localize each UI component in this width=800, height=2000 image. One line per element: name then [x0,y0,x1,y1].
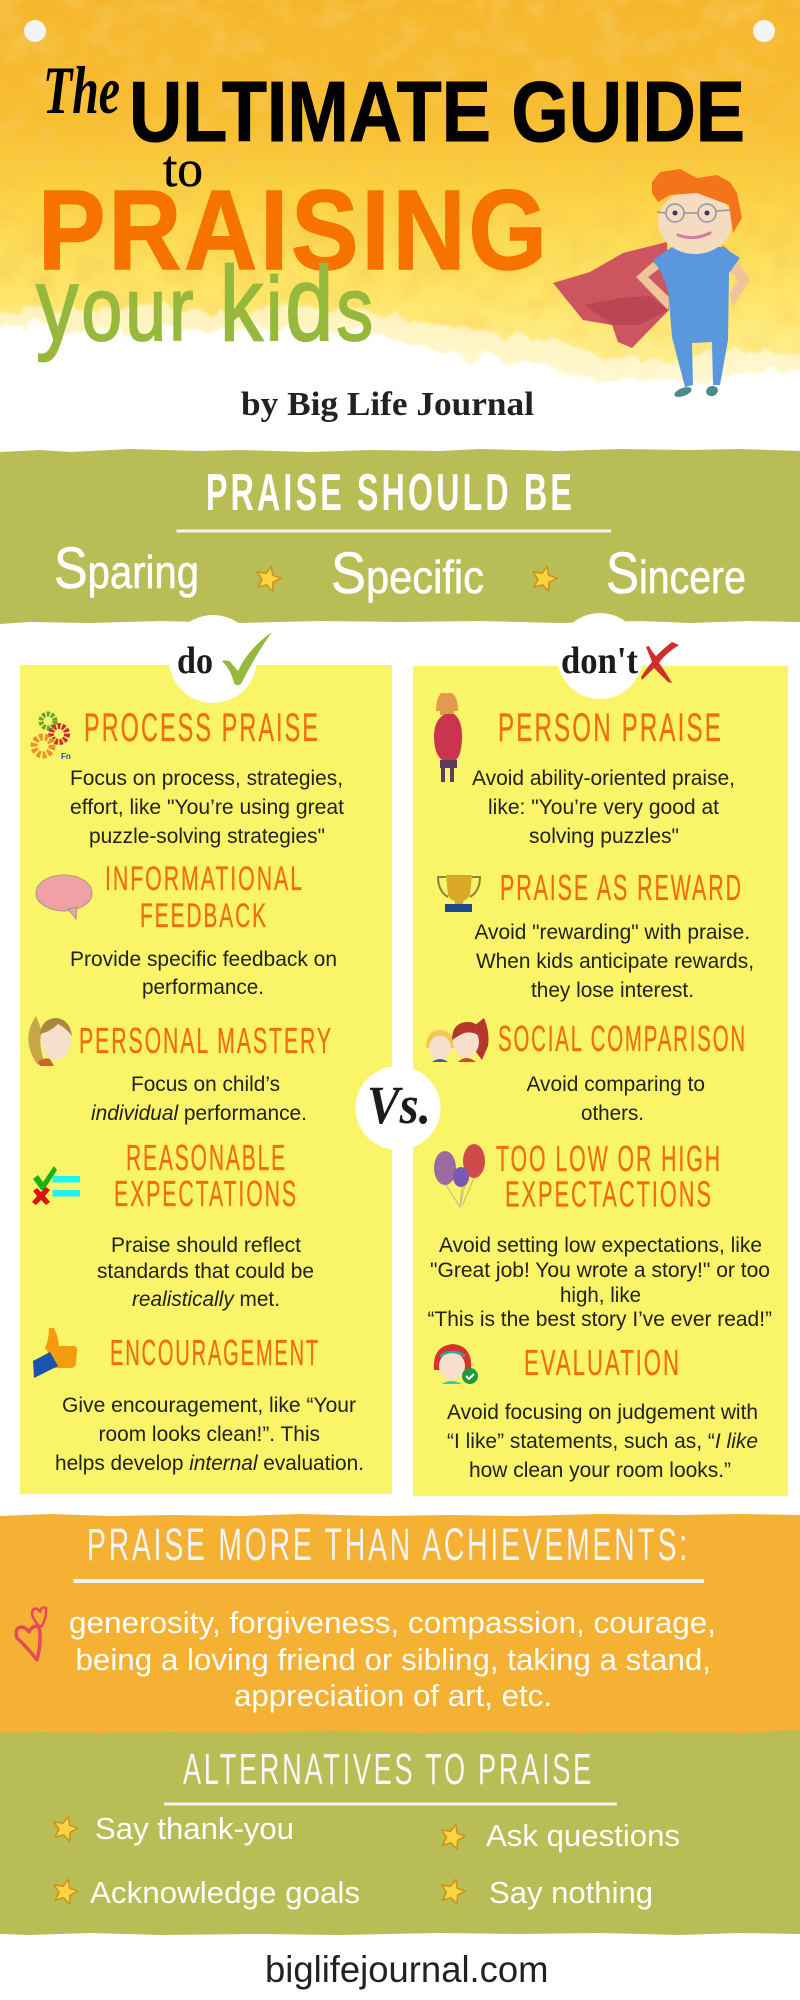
icon: girl with check badge [434,1344,478,1384]
body: like: "You’re very good at [488,796,719,819]
word: specific: Specific [331,541,484,606]
body [70,767,344,848]
heading: PERSONAL MASTERY [79,1020,333,1061]
body: Avoid ability-oriented praise, [472,767,735,790]
body: solving puzzles" [529,825,679,848]
hole right [753,20,775,42]
footer url: biglifejournal.com [265,1949,548,1990]
band: alternatives to praise [0,1730,800,1935]
illustration: superhero boy [553,169,750,399]
item: process praise [34,706,344,848]
don't badge [557,613,679,699]
versus badge [356,1066,440,1150]
heading: PROCESS PRAISE [84,706,320,750]
body: Focus on child’s [131,1073,280,1096]
title line: your kids: your kids [36,245,376,363]
item: personal mastery [28,1016,333,1125]
list item: say nothing: Say nothing [489,1875,653,1910]
body: appreciation of art, etc. [234,1678,552,1713]
icon: red cross [641,642,679,683]
body [447,1401,758,1482]
heading: ENCOURAGEMENT [110,1332,320,1373]
item: social comparison [426,1018,747,1125]
do badge [169,615,272,703]
item: reasonable expectations [32,1137,314,1311]
body: Give encouragement, like “Your [62,1394,356,1417]
body: Avoid "rewarding" with praise. [474,921,750,944]
body: others. [581,1102,644,1125]
body [428,1234,772,1331]
title word: The: The [43,52,120,128]
list item: ask questions: Ask questions [486,1818,680,1853]
body: effort, like "You’re using great [70,796,344,819]
title word: to: to [163,141,203,198]
icon: check mark [222,632,272,685]
body: helps develop internal evaluation. [55,1452,364,1475]
body [472,767,735,848]
body [55,1394,364,1475]
body: Avoid focusing on judgement with [447,1401,758,1424]
panel: do [20,615,392,1494]
body [70,948,337,999]
list item: acknowledge goals: Acknowledge goals [90,1875,360,1910]
body: "Great job! You wrote a story!" or too [430,1259,770,1282]
word: sparing: Sparing [54,536,199,601]
icon: girl with ponytail [28,1016,72,1066]
icon: balloons [434,1144,485,1207]
body: “This is the best story I’ve ever read!” [428,1308,772,1331]
heading: REASONABLE [126,1137,287,1178]
item: person praise [434,693,735,848]
icon: brain speech bubble [36,875,92,919]
item: encouragement [33,1328,364,1475]
body [526,1073,705,1125]
item: informational feedback [36,860,337,999]
item: too low or high expectations [428,1138,772,1331]
body [97,1234,314,1311]
word: sincere: Sincere [606,541,746,606]
icon: trophy: 1 [454,881,461,896]
title line: praising: PRAISING [38,167,550,293]
body: how clean your room looks.” [469,1459,731,1482]
item: praise as reward [438,867,754,1002]
icon: star [253,563,283,592]
icon: two girls [426,1018,488,1062]
band: praise more than achievements [0,1514,800,1734]
header watercolor background [0,0,800,385]
body: they lose interest. [531,979,694,1002]
body: high, like [560,1284,641,1307]
icon: gears: Fn [61,752,71,761]
hole left [24,20,46,42]
heading line two: FEEDBACK [140,897,268,935]
item: evaluation [434,1342,758,1482]
body: puzzle-solving strategies" [89,825,325,848]
heading: praise should be: PRAISE SHOULD BE [206,464,575,522]
rule [164,1802,617,1806]
icon: star [529,563,559,592]
body: standards that could be [97,1260,314,1283]
body [91,1073,307,1125]
body: room looks clean!”. This [98,1423,320,1446]
body: performance. [142,976,264,999]
do label: do [177,640,213,682]
list item: say thank-you: Say thank-you [95,1811,294,1846]
icon: trophy [438,875,480,912]
body: When kids anticipate rewards, [476,950,754,973]
rule [176,530,611,532]
body: Avoid comparing to [526,1073,705,1096]
body: Focus on process, strategies, [70,767,343,790]
body [474,921,754,1002]
title [36,52,745,363]
body: Provide specific feedback on [70,948,337,971]
versus badge: Vs. [367,1075,431,1135]
body: “I like” statements, such as, “I like [447,1430,758,1453]
band: praise should be [0,449,800,624]
icon: standing person [434,693,462,782]
rule [74,1579,704,1583]
panel: don't [413,613,788,1496]
icon: thumbs up [33,1328,77,1378]
heading: INFORMATIONAL [105,860,304,898]
body [69,1605,716,1713]
icon: check and cross list [32,1166,80,1205]
body: being a loving friend or sibling, taking a stand, [76,1642,711,1677]
icon: gears [34,714,71,761]
don't label: don't [561,640,638,682]
body: generosity, forgiveness, compassion, courage, [69,1605,716,1640]
body: individual performance. [91,1102,307,1125]
body: Avoid setting low expectations, like [439,1234,762,1257]
heading line two: EXPECTATIONS [114,1173,298,1214]
byline: by Big Life Journal [241,386,534,423]
icon: hearts [16,1608,46,1660]
body: Praise should reflect [111,1234,301,1257]
heading: EVALUATION [524,1342,681,1383]
body: realistically met. [132,1288,280,1311]
